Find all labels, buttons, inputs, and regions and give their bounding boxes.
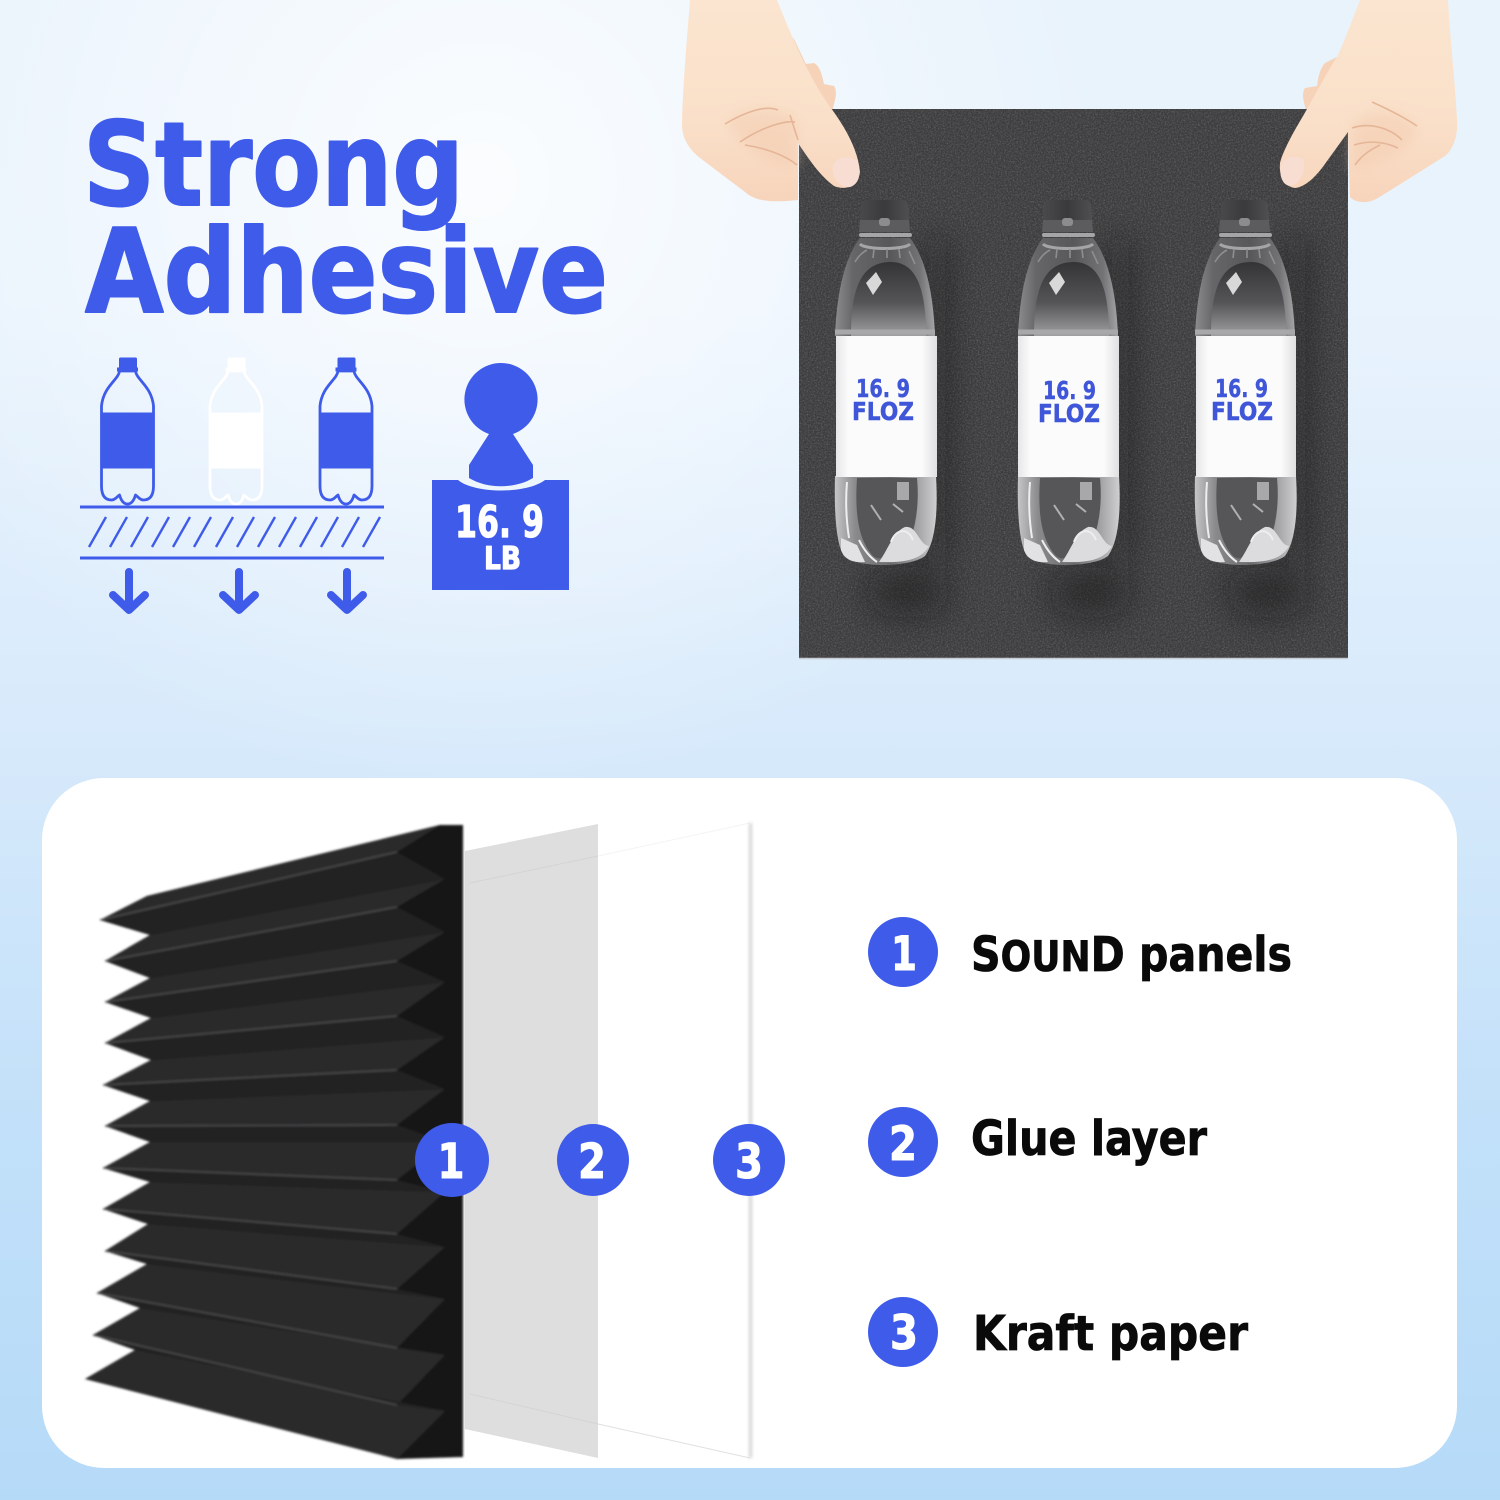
right hand	[1280, 0, 1457, 202]
icon: weight 16.9 LB	[432, 363, 569, 590]
badge 2 on glue	[557, 1124, 629, 1196]
icon: down arrows	[113, 572, 363, 610]
bottle 3	[1195, 200, 1297, 565]
glue layer sheet	[465, 824, 598, 1458]
icon: bottles on adhesive layer	[80, 358, 384, 610]
legend item: glue layer: 2	[889, 1117, 917, 1172]
legend item: kraft paper	[868, 1297, 1248, 1367]
weight label: LB	[484, 541, 521, 577]
bottle 2	[1018, 200, 1120, 565]
bottle 2: 16. 9	[1043, 376, 1096, 405]
bottle 3: FLOZ	[1211, 397, 1273, 426]
weight ball	[464, 363, 538, 486]
bottle 3: 16. 9	[1215, 374, 1268, 403]
left hand	[682, 0, 860, 201]
title: Adhesive	[85, 205, 608, 340]
weight block	[432, 480, 569, 590]
badge 3 on paper	[713, 1124, 785, 1196]
adhesive layer hatching	[80, 507, 384, 558]
legend item: sound panels: SOUND panels	[971, 927, 1292, 983]
legend item: kraft paper: Kraft paper	[973, 1306, 1248, 1362]
kraft paper sheet	[598, 823, 752, 1458]
badge 2 on glue: 2	[578, 1134, 606, 1190]
photo: hands holding foam panel with bottles	[682, 0, 1457, 658]
weight label: 16. 9	[455, 497, 544, 548]
legend item: sound panels: 1	[891, 927, 917, 982]
badge 3 on paper: 3	[735, 1134, 763, 1190]
bottle 1: 16. 9	[856, 374, 910, 403]
legend item: kraft paper: 3	[890, 1306, 918, 1361]
weight label	[455, 497, 544, 577]
right hand rear fingers	[1303, 57, 1340, 112]
legend item: sound panels	[868, 917, 1292, 987]
icon: middle white bottle	[210, 358, 262, 504]
title: Strong	[83, 98, 464, 233]
acoustic foam wedge panel	[85, 825, 463, 1459]
badge 1 on foam	[415, 1123, 489, 1197]
bottle shadows	[866, 240, 1310, 618]
bottle 2: FLOZ	[1038, 399, 1100, 428]
left hand rear fingers	[793, 37, 836, 112]
foam panel	[799, 109, 1348, 658]
icon: left bottle	[102, 358, 154, 504]
title	[83, 98, 608, 340]
legend	[868, 917, 1292, 1367]
legend item: glue layer: Glue layer	[971, 1111, 1207, 1167]
bottle 1	[835, 200, 937, 565]
icon: right bottle	[320, 358, 372, 504]
badge 1 on foam: 1	[438, 1134, 464, 1190]
panel: layer diagram	[42, 778, 1457, 1468]
bottle 1: FLOZ	[852, 397, 914, 426]
legend item: glue layer	[868, 1107, 1207, 1177]
